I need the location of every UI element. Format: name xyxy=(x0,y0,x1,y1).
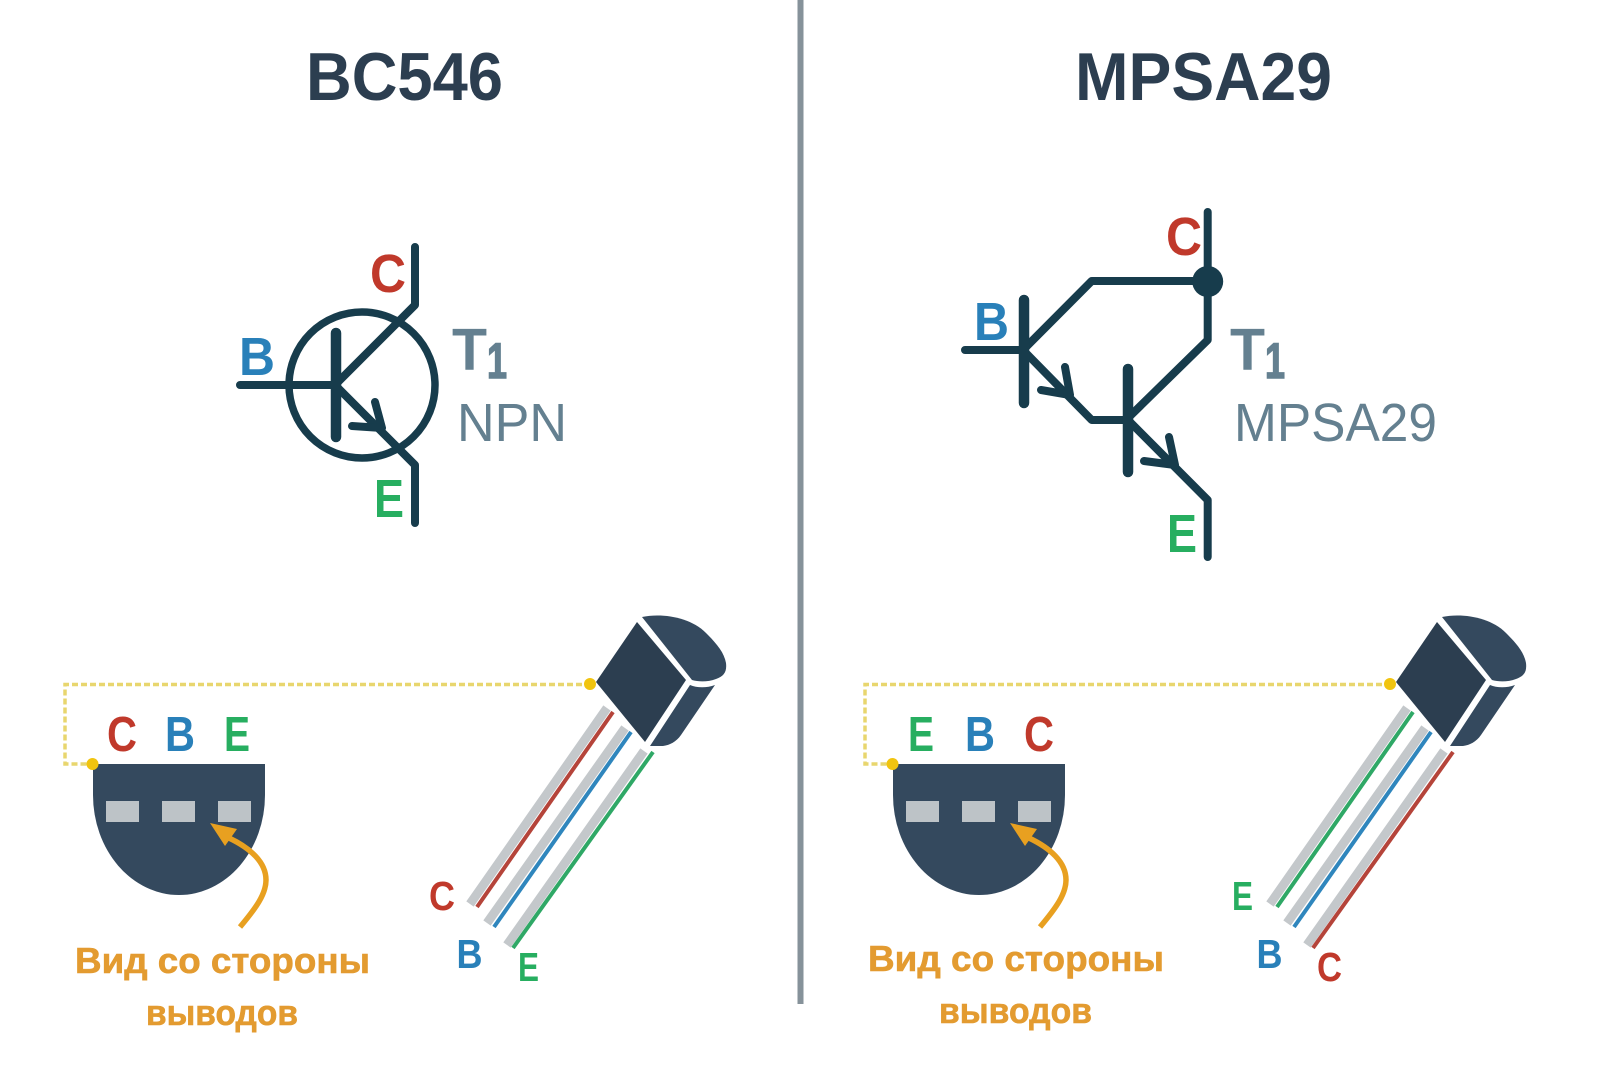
transistor TO-92 package: C xyxy=(1317,944,1342,990)
dashed link between views xyxy=(865,684,1391,764)
label: base B: B xyxy=(974,292,1009,352)
arrow: pointing to pins xyxy=(210,823,266,927)
pads xyxy=(906,801,1051,822)
pinout: bottom view xyxy=(865,678,1396,1031)
label: emitter E: E xyxy=(374,469,404,529)
panel: BC546 xyxy=(65,39,726,1033)
designator T1: 1 xyxy=(1265,333,1285,389)
leads xyxy=(1270,708,1453,948)
schematic symbol: NPN transistor xyxy=(239,244,567,529)
schematic symbol: Darlington transistor xyxy=(965,207,1437,564)
body xyxy=(596,622,686,742)
leads xyxy=(470,708,653,948)
pin label B: B xyxy=(965,708,995,762)
label: collector C: C xyxy=(370,244,406,304)
pin label B: B xyxy=(165,708,195,762)
title: MPSA29: MPSA29 xyxy=(1075,39,1332,115)
title: BC546: BC546 xyxy=(306,39,503,115)
pads xyxy=(106,801,251,822)
designator T1 xyxy=(1230,317,1285,389)
caption: Вид со стороны xyxy=(868,938,1164,979)
arrow: pointing to pins xyxy=(1010,823,1066,927)
package bottom view xyxy=(893,764,1065,895)
transistor TO-92 package: B xyxy=(1256,931,1282,977)
panel: MPSA29 xyxy=(865,39,1526,1031)
lead labels: E xyxy=(1232,873,1253,919)
designator T1 xyxy=(452,317,507,389)
label: collector C: C xyxy=(1166,207,1202,267)
link dots xyxy=(86,678,596,770)
pinout: bottom view: выводов xyxy=(146,992,298,1033)
pin label C: C xyxy=(107,708,137,762)
label: base B: B xyxy=(239,327,275,387)
lead labels: C xyxy=(429,873,455,919)
transistor TO-92 package: E xyxy=(518,944,539,990)
caption: Вид со стороны xyxy=(75,940,370,981)
link dots xyxy=(886,678,1396,770)
body xyxy=(1396,622,1486,742)
designator T1: T xyxy=(1230,317,1265,383)
transistor TO-92 package xyxy=(429,616,726,990)
type label NPN: NPN xyxy=(457,393,567,453)
pin label E: E xyxy=(908,708,934,762)
package bottom view xyxy=(93,764,265,895)
label: emitter E: E xyxy=(1167,504,1197,564)
pin label E: E xyxy=(224,708,250,762)
pinout: bottom view xyxy=(65,678,596,1033)
transistor TO-92 package xyxy=(1232,616,1526,990)
pinout: bottom view: выводов xyxy=(939,990,1092,1031)
transistor TO-92 package: B xyxy=(456,931,482,977)
divider between panels xyxy=(798,0,804,1004)
designator T1: T xyxy=(452,317,487,383)
dashed link between views xyxy=(65,684,591,764)
pin label C: C xyxy=(1024,708,1054,762)
designator T1: 1 xyxy=(487,333,507,389)
type label MPSA29: MPSA29 xyxy=(1234,393,1437,453)
